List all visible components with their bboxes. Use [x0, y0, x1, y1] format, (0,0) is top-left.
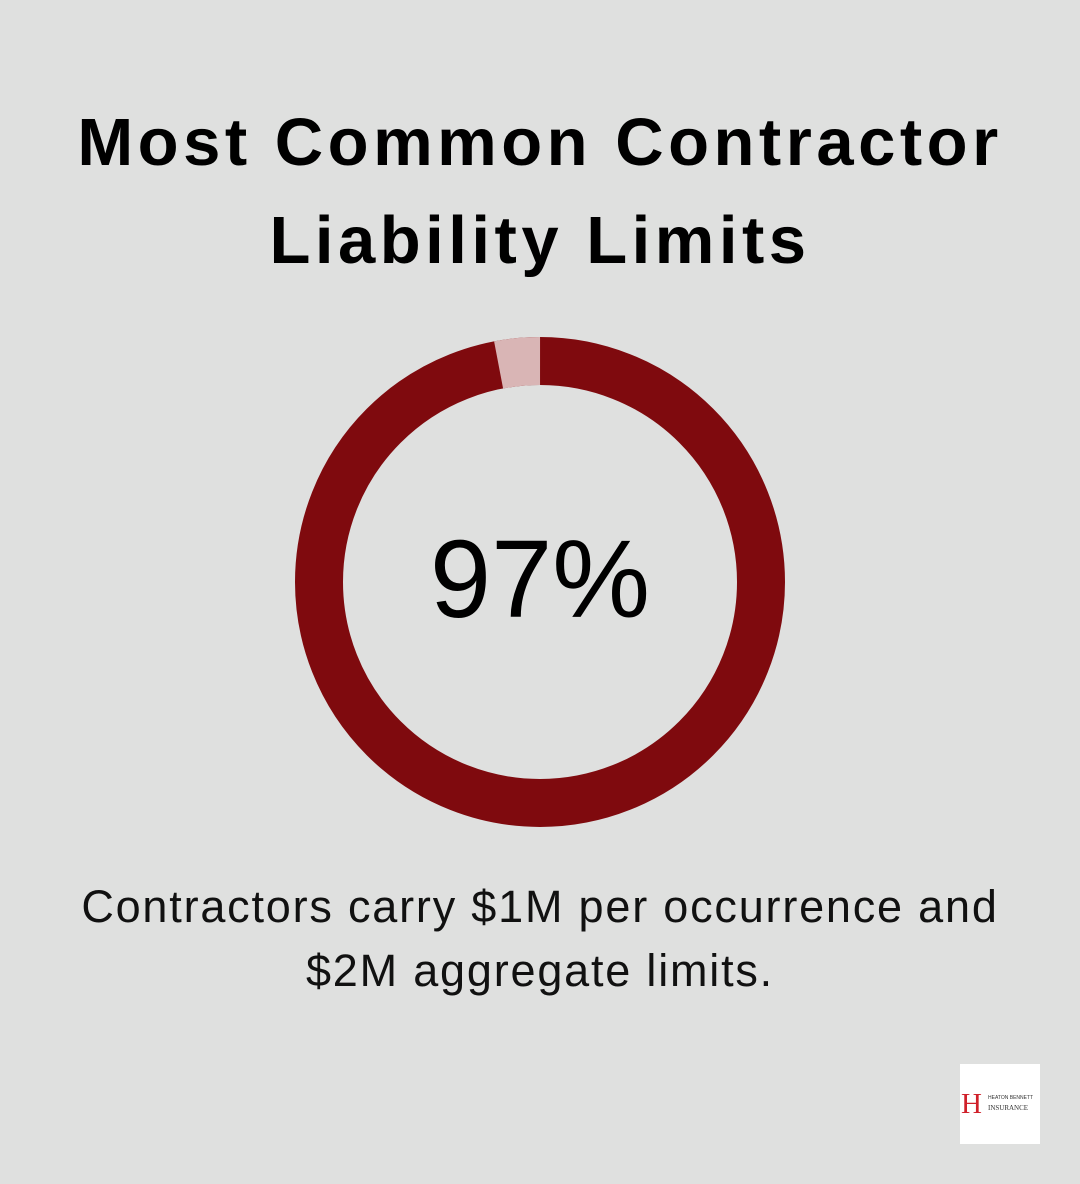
title: Liability Limits: [269, 203, 811, 278]
caption: [81, 881, 999, 996]
title: [77, 105, 1003, 278]
logo: HEATON BENNETT: [988, 1095, 1033, 1101]
caption: Contractors carry $1M per occurrence and: [81, 881, 999, 932]
logo: INSURANCE: [988, 1104, 1028, 1112]
logo: H: [961, 1088, 982, 1120]
title: Most Common Contractor: [77, 105, 1003, 180]
donut chart: 97%: [430, 518, 650, 641]
logo: [960, 1064, 1040, 1144]
caption: $2M aggregate limits.: [306, 945, 774, 996]
